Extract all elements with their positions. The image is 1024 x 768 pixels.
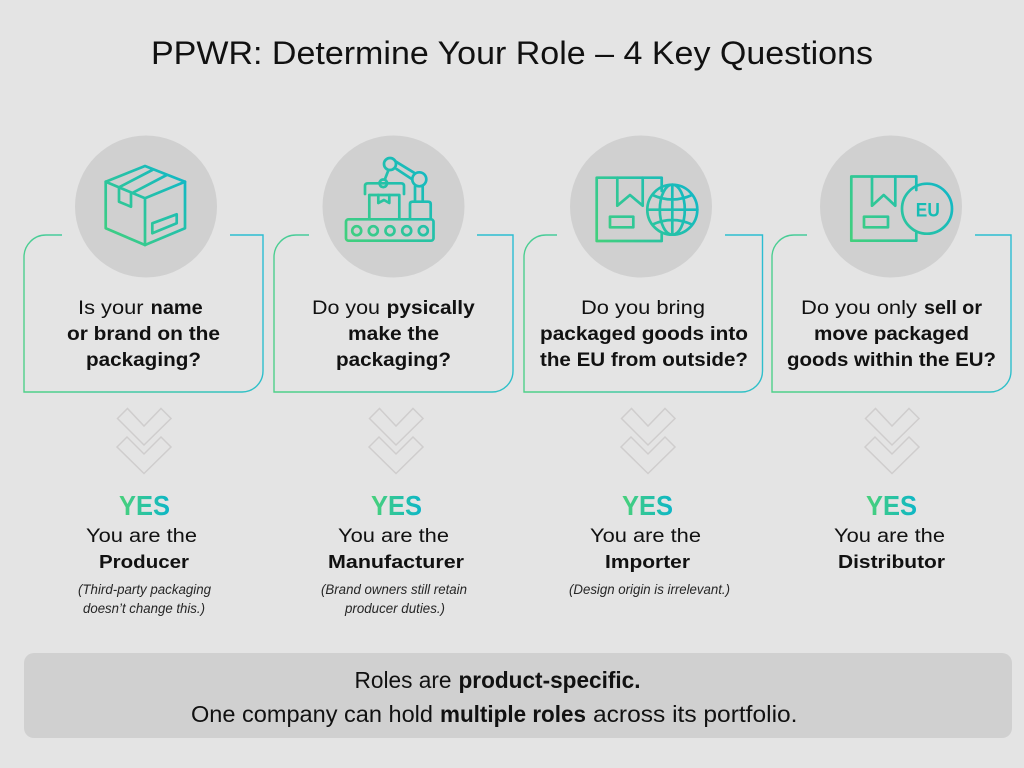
answer 3: importer: (Design origin is irrelevant.)	[569, 582, 730, 597]
answer 2: manufacturer: producer duties.)	[344, 601, 445, 616]
answer 3: importer: YES	[622, 490, 673, 521]
answer 2: manufacturer: (Brand owners still retain	[321, 582, 467, 597]
answer 1: producer: doesn’t change this.)	[83, 601, 205, 616]
callout: roles are product-specific: Roles are	[354, 667, 452, 693]
arrow: double chevron 4	[865, 408, 919, 474]
question 4 text: goods within the EU?	[787, 350, 996, 371]
card outline 2	[274, 235, 513, 392]
answer 1: producer	[78, 490, 211, 616]
arrow: double chevron 3	[621, 408, 675, 474]
answer 1: producer: YES	[119, 490, 170, 521]
answer 3: importer: Importer	[605, 551, 690, 572]
panel: question 2	[274, 136, 513, 392]
question 3 text: Do you bring	[581, 298, 705, 319]
callout: roles are product-specific: multiple roles	[440, 701, 586, 727]
question 4 text: move packaged	[814, 324, 969, 345]
question 3 text: the EU from outside?	[540, 350, 748, 371]
answer 2: manufacturer	[321, 490, 467, 616]
answer 3: importer: You are the	[590, 526, 701, 547]
callout: roles are product-specific: One company can hold	[191, 701, 433, 727]
question 2 text: pysically	[387, 298, 475, 319]
answer 2: manufacturer: YES	[371, 490, 422, 521]
card outline 4	[772, 235, 1011, 392]
question 1 text: or brand on the	[67, 324, 220, 345]
question 2 text: Do you	[312, 298, 380, 319]
answer 4: distributor: Distributor	[838, 551, 945, 572]
icon circle 4	[820, 136, 962, 278]
answer 1: producer: You are the	[86, 526, 197, 547]
question 1 text: name	[151, 298, 203, 319]
question 1 text	[67, 298, 220, 371]
arrow: double chevron 1	[117, 408, 171, 474]
panel: question 3	[524, 136, 762, 392]
icon: robot arm on conveyor	[346, 158, 434, 241]
answer 4: distributor: You are the	[834, 526, 945, 547]
callout: roles are product-specific: product-specific.	[458, 667, 640, 693]
icon: parcel with EU badge: EU	[916, 201, 940, 222]
card outline 1	[24, 235, 263, 392]
question 1 text: Is your	[78, 298, 144, 319]
question 4 text: sell or	[924, 298, 983, 319]
icon: parcel with globe	[597, 178, 697, 241]
panel: question 1	[24, 136, 263, 392]
answer 2: manufacturer: You are the	[338, 526, 449, 547]
answer 1: producer: Producer	[99, 551, 189, 572]
card outline 3	[524, 235, 762, 392]
icon: parcel with EU badge	[851, 176, 952, 241]
question 2 text: make the	[348, 324, 439, 345]
question 1 text: packaging?	[86, 350, 201, 371]
answer 2: manufacturer: Manufacturer	[328, 551, 464, 572]
question 3 text: packaged goods into	[540, 324, 748, 345]
icon: cardboard box	[106, 166, 185, 245]
icon circle 1	[75, 136, 217, 278]
question 3 text	[540, 298, 748, 371]
icon circle 2	[322, 136, 464, 278]
question 4 text	[787, 298, 996, 371]
panel: question 4	[772, 136, 1011, 392]
title: PPWR: Determine Your Role – 4 Key Questions	[151, 35, 873, 71]
callout: roles are product-specific	[24, 653, 1012, 738]
answer 4: distributor	[834, 490, 945, 572]
question 2 text	[312, 298, 475, 371]
callout: roles are product-specific: across its portfolio.	[593, 701, 798, 727]
question 4 text: Do you only	[801, 298, 918, 319]
question 2 text: packaging?	[336, 350, 451, 371]
answer 4: distributor: YES	[866, 490, 917, 521]
answer 3: importer	[569, 490, 730, 597]
answer 1: producer: (Third-party packaging	[78, 582, 211, 597]
icon circle 3	[570, 136, 712, 278]
arrow: double chevron 2	[369, 408, 423, 474]
